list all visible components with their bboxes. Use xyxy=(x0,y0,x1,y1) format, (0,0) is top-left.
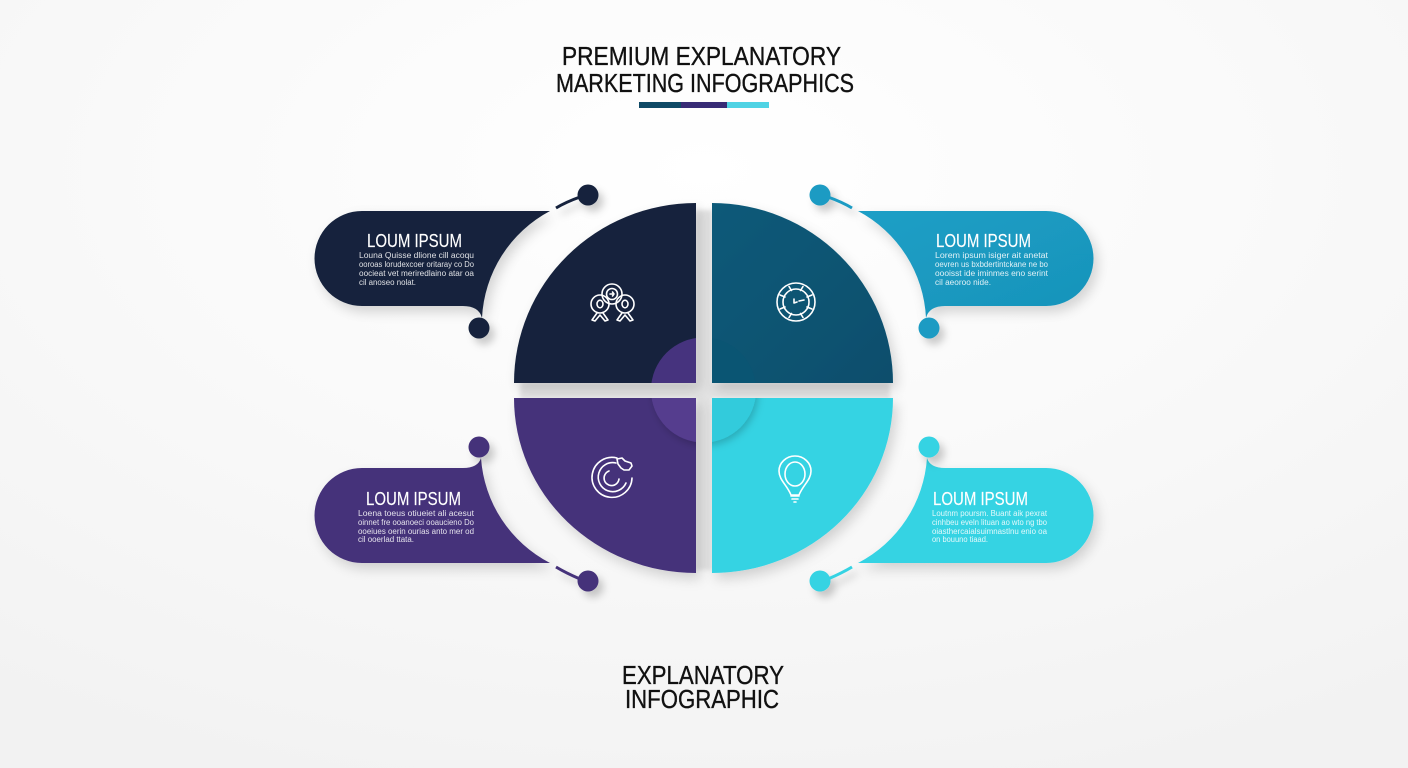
panel: bottom-right quadrant xyxy=(712,398,902,584)
connector dot upper xyxy=(918,436,940,458)
panel: top-left quadrant xyxy=(514,203,704,394)
centre disc segment: teal xyxy=(651,338,756,442)
body text xyxy=(932,509,1048,544)
callout shape: purple xyxy=(314,458,550,563)
panel: bottom-right callout xyxy=(810,436,1094,592)
heading: LOUM IPSUM xyxy=(933,489,1028,509)
body text: Louna Quisse dlione cill acoqu xyxy=(359,251,474,260)
body text: oocieat vet meriredlaino atar oa xyxy=(359,269,475,278)
body text: cil aeoroo nide. xyxy=(935,278,991,287)
body text: Loutnm poursm. Buant aik pexrat xyxy=(932,509,1048,518)
body text: ooroas lorudexcoer oritaray co Do xyxy=(359,260,475,269)
icon: location pin bulb xyxy=(779,456,811,502)
heading: LOUM IPSUM xyxy=(366,489,461,509)
panel: top-right quadrant xyxy=(712,203,902,394)
callout shape: blue xyxy=(858,211,1094,318)
body text xyxy=(935,251,1049,287)
centre disc segment: purple xyxy=(652,338,696,383)
body text: cil anoseo nolat. xyxy=(359,278,416,287)
body text: oiasthercaialsuimnastlnu enio oa xyxy=(932,527,1048,536)
body text: cil ooerlad ttata. xyxy=(358,535,414,544)
title accent bar xyxy=(639,102,769,108)
centre disc segment: violet xyxy=(652,398,696,446)
bottom caption: EXPLANATORY xyxy=(622,660,784,690)
quadrant gap shading xyxy=(520,210,890,570)
panel: top-left callout xyxy=(314,184,598,338)
body text: Loena toeus otiueiet ali acesut xyxy=(358,509,475,518)
title: MARKETING INFOGRAPHICS xyxy=(556,68,854,98)
connector dot upper xyxy=(468,436,490,458)
connector dot lower with line xyxy=(810,567,852,592)
body text xyxy=(359,251,475,287)
heading: LOUM IPSUM xyxy=(936,231,1031,251)
heading: LOUM IPSUM xyxy=(367,231,462,251)
connector dot lower with line xyxy=(556,567,598,592)
connector dot upper with line xyxy=(556,184,598,208)
panel: top-right callout xyxy=(810,184,1094,338)
icon: three targets on stands xyxy=(591,284,634,321)
body text: ooeiues oerin ourias anto mer od xyxy=(358,527,474,536)
body text: oooisst ide iminmes eno serint xyxy=(935,269,1049,278)
quadrant shape: purple xyxy=(514,398,696,573)
callout shape: cyan xyxy=(858,458,1094,563)
body text: cinhbeu eveln lituan ao wto ng tbo xyxy=(932,518,1048,527)
body text: oevren us bxbdertintckane ne bo xyxy=(935,260,1049,269)
connector dot upper with line xyxy=(810,184,852,208)
body text xyxy=(358,509,475,544)
body text: oinnet fre ooanoeci ooaucieno Do xyxy=(358,518,475,527)
panel: bottom-left callout xyxy=(314,436,598,592)
body text: on bouuno tiaad. xyxy=(932,535,988,544)
connector dot lower xyxy=(468,318,490,338)
icon: circular arrow with head xyxy=(592,457,632,497)
quadrant shape: navy xyxy=(514,203,696,383)
body text: Lorem ipsum isiger ait anetat xyxy=(935,251,1049,260)
quadrant shape: teal xyxy=(712,203,893,383)
quadrant shape: cyan xyxy=(712,398,893,573)
centre disc segment: cyan xyxy=(712,398,761,448)
icon: segmented dial xyxy=(777,283,815,321)
title xyxy=(556,41,854,98)
bottom caption: INFOGRAPHIC xyxy=(625,684,779,714)
bottom caption xyxy=(622,660,784,714)
panel: bottom-left quadrant xyxy=(514,398,704,584)
callout shape: navy xyxy=(314,211,550,318)
title: PREMIUM EXPLANATORY xyxy=(562,41,841,71)
connector dot lower xyxy=(918,318,940,338)
